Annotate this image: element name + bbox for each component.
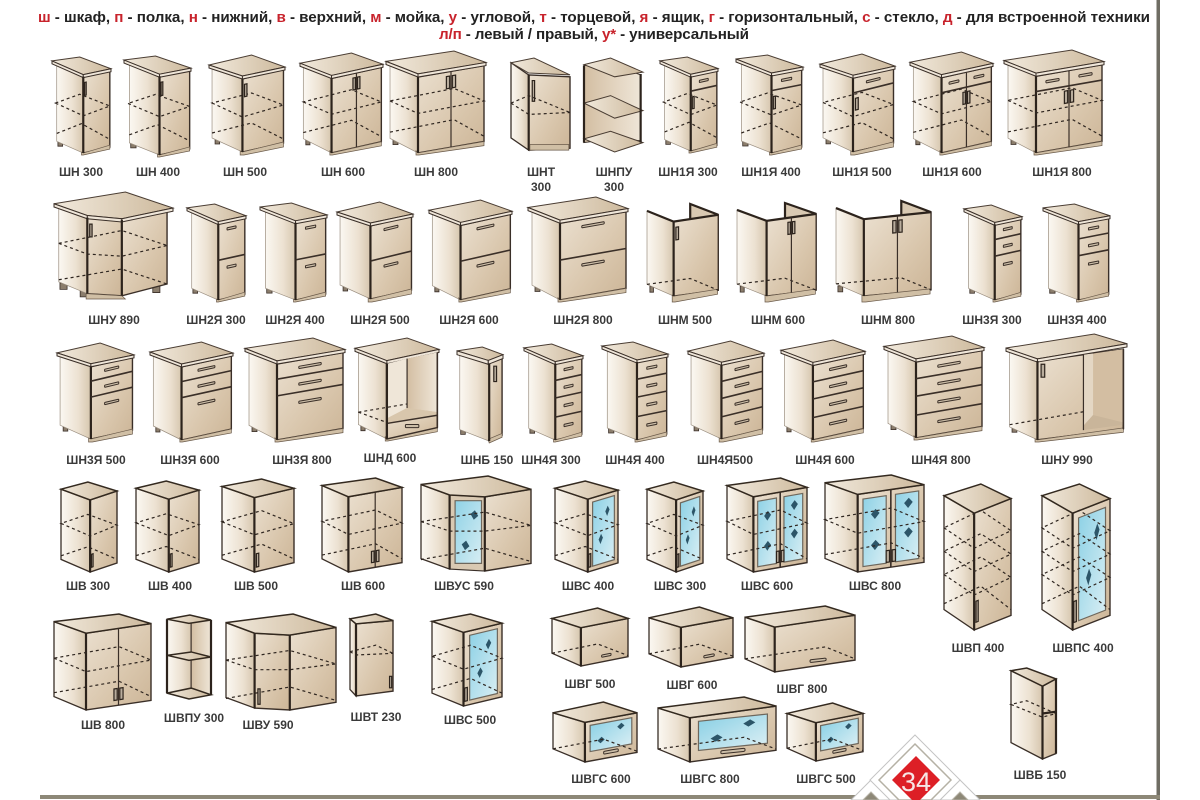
cabinet: ШВ 800: ШВ 800 xyxy=(81,718,125,732)
cabinet: ШН1Я 600: ШН1Я 600 xyxy=(922,165,982,179)
cabinet: ШН3Я 500 xyxy=(57,343,134,467)
cabinet: ШВГС 500 xyxy=(787,703,863,786)
cabinet: ШВГС 600: ШВГС 600 xyxy=(571,772,631,786)
cabinet: ШВБ 150: ШВБ 150 xyxy=(1014,768,1067,782)
cabinet: ШН 800 xyxy=(386,51,486,179)
cabinet: ШН3Я 800: ШН3Я 800 xyxy=(272,453,332,467)
cabinet: ШВП 400 xyxy=(944,484,1011,655)
cabinet: ШНПУ 300: ШНПУ xyxy=(596,165,633,179)
cabinet: ШВГ 600: ШВГ 600 xyxy=(667,678,718,692)
page number badge: 34 xyxy=(901,767,931,797)
cabinet: ШН 600 xyxy=(300,53,383,179)
cabinet: ШН4Я 600 xyxy=(781,340,865,467)
cabinet: ШН2Я 600: ШН2Я 600 xyxy=(439,313,499,327)
cabinet: ШН1Я 400: ШН1Я 400 xyxy=(741,165,801,179)
cabinet: ШНМ 500 xyxy=(647,204,718,327)
cabinet: ШВПУ 300 xyxy=(164,615,224,725)
cabinet: ШН4Я 300: ШН4Я 300 xyxy=(521,453,581,467)
cabinet: ШН4Я500 xyxy=(688,341,764,467)
cabinet: ШН4Я 800 xyxy=(884,336,984,467)
cabinet: ШВ 400: ШВ 400 xyxy=(148,579,192,593)
cabinet: ШНБ 150 xyxy=(457,347,514,467)
cabinet: ШВС 300: ШВС 300 xyxy=(654,579,706,593)
cabinet: ШВС 400 xyxy=(555,481,618,593)
cabinet: ШНПУ 300: 300 xyxy=(604,180,624,194)
cabinet: ШН 500: ШН 500 xyxy=(223,165,267,179)
cabinet: ШН3Я 400: ШН3Я 400 xyxy=(1047,313,1107,327)
cabinet: ШН3Я 400 xyxy=(1043,204,1110,327)
cabinet: ШНУ 990 xyxy=(1006,334,1127,467)
cabinet: ШН3Я 300 xyxy=(962,205,1022,327)
cabinet: ШВГ 500: ШВГ 500 xyxy=(565,677,616,691)
cabinet: ШН4Я 600: ШН4Я 600 xyxy=(795,453,855,467)
cabinet: ШН1Я 500 xyxy=(820,54,895,179)
cabinet: ШНМ 800: ШНМ 800 xyxy=(861,313,915,327)
title: legend of abbreviations: ш - шкаф, п - полка, н - нижний, в - верхний, м - мойка, у - угловой, т - торцевой, я - ящик, г - горизонтальный, с - стекло, д - для встроенной техники xyxy=(38,9,1150,26)
cabinet: ШВ 600 xyxy=(322,478,402,593)
cabinet: ШН 400 xyxy=(124,56,191,179)
cabinet: ШВ 300 xyxy=(61,482,117,593)
page number badge xyxy=(851,735,980,800)
cabinet: ШВС 400: ШВС 400 xyxy=(562,579,614,593)
cabinet: ШВУ 590: ШВУ 590 xyxy=(242,718,294,732)
cabinet: ШН3Я 300: ШН3Я 300 xyxy=(962,313,1022,327)
cabinet: ШНМ 800 xyxy=(836,201,931,327)
cabinet: ШВГ 600 xyxy=(649,607,733,692)
cabinet: ШНМ 600: ШНМ 600 xyxy=(751,313,805,327)
cabinet: ШН2Я 300: ШН2Я 300 xyxy=(186,313,246,327)
cabinet: ШН 500 xyxy=(209,55,285,179)
cabinet: ШВГС 800: ШВГС 800 xyxy=(680,772,740,786)
cabinet: ШН2Я 400: ШН2Я 400 xyxy=(265,313,325,327)
cabinet: ШНУ 990: ШНУ 990 xyxy=(1041,453,1093,467)
cabinet: ШНПУ 300 xyxy=(584,58,643,194)
cabinet: ШВС 600 xyxy=(727,478,807,593)
cabinet: ШВУ 590 xyxy=(226,614,336,732)
cabinet: ШН3Я 600 xyxy=(150,342,233,467)
cabinet: ШВУС 590 xyxy=(421,476,531,593)
cabinet: ШН2Я 500 xyxy=(337,202,413,327)
cabinet: ШН4Я 400 xyxy=(602,342,668,467)
cabinet: ШН2Я 400 xyxy=(260,203,327,327)
cabinet: ШН2Я 300 xyxy=(186,204,246,327)
cabinet: ШН 300 xyxy=(52,57,111,179)
cabinet: ШН4Я 300 xyxy=(521,344,583,467)
cabinet: ШН3Я 600: ШН3Я 600 xyxy=(160,453,220,467)
cabinet: ШН1Я 400 xyxy=(736,55,803,179)
cabinet: ШН1Я 300 xyxy=(658,57,718,179)
cabinet: ШНТ 300: ШНТ xyxy=(527,165,556,179)
cabinet: ШВ 600: ШВ 600 xyxy=(341,579,385,593)
cabinet: ШН2Я 800 xyxy=(528,197,628,327)
cabinet: ШН2Я 500: ШН2Я 500 xyxy=(350,313,410,327)
cabinet: ШН4Я 800: ШН4Я 800 xyxy=(911,453,971,467)
cabinet: ШВС 800: ШВС 800 xyxy=(849,579,901,593)
cabinet: ШВ 500: ШВ 500 xyxy=(234,579,278,593)
cabinet: ШН3Я 800 xyxy=(245,338,345,467)
cabinet: ШН 400: ШН 400 xyxy=(136,165,180,179)
cabinet: ШВГ 800 xyxy=(745,606,855,696)
cabinet: ШН1Я 600 xyxy=(910,52,993,179)
cabinet: ШНМ 500: ШНМ 500 xyxy=(658,313,712,327)
cabinet: ШВ 800 xyxy=(54,614,151,732)
cabinet: ШВПУ 300: ШВПУ 300 xyxy=(164,711,224,725)
cabinet: ШН1Я 500: ШН1Я 500 xyxy=(832,165,892,179)
cabinet: ШН1Я 300: ШН1Я 300 xyxy=(658,165,718,179)
cabinet: ШВТ 230 xyxy=(350,614,402,724)
cabinet: ШН4Я 400: ШН4Я 400 xyxy=(605,453,665,467)
cabinet: ШН2Я 600 xyxy=(429,200,512,327)
cabinet: ШВУС 590: ШВУС 590 xyxy=(434,579,494,593)
cabinet: ШВ 400 xyxy=(136,481,199,593)
cabinet: ШВС 500: ШВС 500 xyxy=(444,713,496,727)
cabinet: ШНМ 600 xyxy=(737,203,816,327)
cabinet: ШНУ 890: ШНУ 890 xyxy=(88,313,140,327)
cabinet: ШВТ 230: ШВТ 230 xyxy=(351,710,402,724)
title: legend of abbreviations xyxy=(38,9,1150,43)
cabinet: ШВГ 800: ШВГ 800 xyxy=(777,682,828,696)
cabinet: ШВГ 500 xyxy=(552,608,628,691)
cabinet: ШВПС 400 xyxy=(1042,484,1114,655)
cabinet: ШН 800: ШН 800 xyxy=(414,165,458,179)
cabinet: ШВС 600: ШВС 600 xyxy=(741,579,793,593)
cabinet: ШН 300: ШН 300 xyxy=(59,165,103,179)
cabinet: ШН1Я 800: ШН1Я 800 xyxy=(1032,165,1092,179)
cabinet: ШВПС 400: ШВПС 400 xyxy=(1052,641,1114,655)
cabinet: ШВП 400: ШВП 400 xyxy=(952,641,1005,655)
cabinet: ШВГС 500: ШВГС 500 xyxy=(796,772,856,786)
cabinet: ШНБ 150: ШНБ 150 xyxy=(461,453,514,467)
cabinet: ШНТ 300 xyxy=(511,58,570,194)
cabinet: ШНУ 890 xyxy=(54,192,173,327)
cabinet: ШВС 500 xyxy=(432,614,502,727)
cabinet: ШВ 500 xyxy=(222,479,294,593)
cabinet: ШВС 800 xyxy=(825,475,924,593)
cabinet: ШН 600: ШН 600 xyxy=(321,165,365,179)
cabinet: ШНД 600 xyxy=(355,338,439,465)
cabinet: ШВС 300 xyxy=(647,482,706,593)
cabinet: ШН2Я 800: ШН2Я 800 xyxy=(553,313,613,327)
cabinet: ШВ 300: ШВ 300 xyxy=(66,579,110,593)
cabinet: ШНД 600: ШНД 600 xyxy=(364,451,417,465)
cabinet: ШНТ 300: 300 xyxy=(531,180,551,194)
cabinet: ШН1Я 800 xyxy=(1004,50,1104,179)
cabinet: ШВГС 600 xyxy=(553,702,637,786)
cabinet: ШВГС 800 xyxy=(658,697,776,786)
cabinet: ШН4Я500: ШН4Я500 xyxy=(697,453,753,467)
cabinet: ШН3Я 500: ШН3Я 500 xyxy=(66,453,126,467)
cabinet: ШВБ 150 xyxy=(1011,668,1067,782)
title: legend of abbreviations: л/п - левый / правый, у* - универсальный xyxy=(439,26,749,43)
